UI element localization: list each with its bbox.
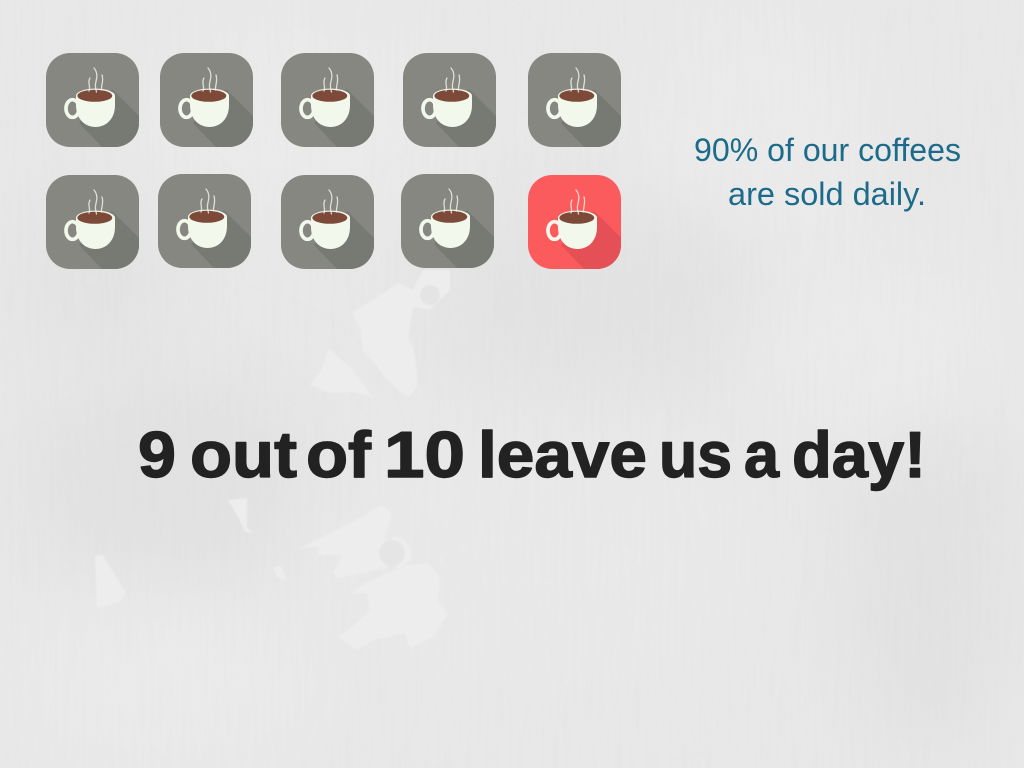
- icon: coffee cup 2: [160, 53, 260, 147]
- icon: coffee cup 6: [46, 175, 146, 269]
- title: 9 out of 10: us: [659, 418, 732, 491]
- title: 9 out of 10: a: [744, 418, 780, 491]
- icon: coffee cup 7: [158, 174, 258, 268]
- icon: coffee cup 10, highlighted red: [528, 175, 628, 269]
- icon: coffee cup 9: [401, 174, 501, 268]
- icon grid: coffee cups: [46, 53, 628, 269]
- title: 9 out of 10: of: [306, 418, 371, 491]
- icon: coffee cup 1: [46, 53, 146, 147]
- title: 9 out of 10: out: [190, 418, 297, 491]
- icon: coffee cup 3: [281, 53, 381, 147]
- icon: coffee cup 5: [528, 53, 628, 147]
- title: 9 out of 10: [138, 418, 926, 491]
- icon: coffee cup 4: [403, 53, 503, 147]
- caption: 90% sold daily: [694, 132, 961, 212]
- title: 9 out of 10: 9: [138, 418, 176, 491]
- icon: coffee cup 8: [281, 175, 381, 269]
- caption: 90% sold daily: are sold daily.: [728, 176, 926, 212]
- caption: 90% sold daily: 90% of our coffees: [694, 132, 961, 168]
- title: 9 out of 10: leave: [478, 418, 647, 491]
- title: 9 out of 10: 10: [384, 418, 465, 491]
- title: 9 out of 10: day!: [792, 418, 926, 491]
